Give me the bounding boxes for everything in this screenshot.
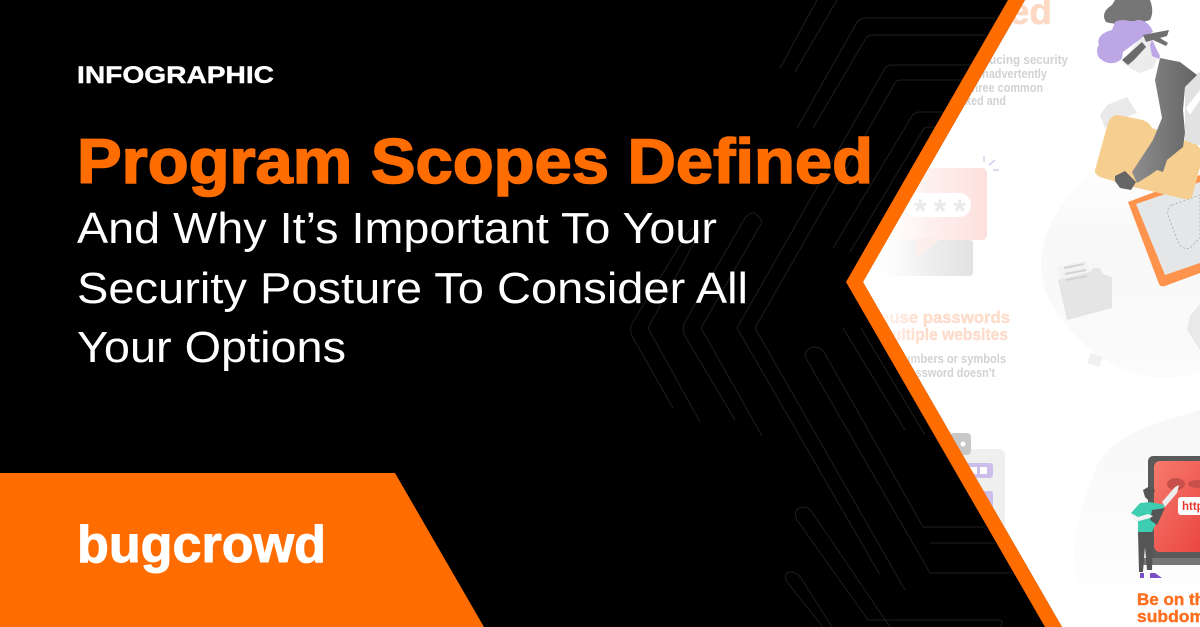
body <box>1185 72 1200 145</box>
face <box>1123 37 1157 73</box>
dark arm <box>1132 58 1197 183</box>
faded intro text: three common <box>968 81 1043 95</box>
subtitle: Security Posture To Consider All <box>77 264 748 313</box>
faded body text <box>906 354 1006 377</box>
background blobs <box>1041 150 1200 625</box>
orange chevron border <box>846 0 1062 627</box>
title: Program Scopes Defined <box>77 127 873 197</box>
yellow folder <box>1095 115 1200 199</box>
icon: password speech bubble <box>870 156 999 276</box>
illustration: person pointing at tablet with URL <box>1131 456 1200 578</box>
mask <box>1122 42 1146 65</box>
faded intro text <box>964 54 1068 105</box>
faded body text: password doesn't <box>903 366 996 380</box>
faded heading: reuse passwords: multiple websites <box>878 326 1008 344</box>
grey file folder <box>1057 260 1092 295</box>
icon: small diamond <box>1087 353 1103 367</box>
panel heading: be on the subdomain <box>1137 592 1200 622</box>
subtitle: And Why It’s Important To Your <box>77 204 717 253</box>
faded intro text: reducing security <box>971 53 1068 67</box>
url box <box>1178 497 1200 515</box>
icon: password form card <box>951 433 1005 528</box>
icon: password speech bubble: *** <box>914 193 967 229</box>
illustration: masked hacker with folder and tablet <box>1057 0 1200 350</box>
background circuit line pattern <box>631 0 1012 627</box>
panel: faded infographic preview <box>840 0 1200 627</box>
faded intro text: inadvertently <box>979 67 1047 81</box>
faded intro text: leaked and <box>950 94 1006 108</box>
tablet body <box>1148 456 1200 565</box>
logo: bugcrowd: bugcrowd <box>77 516 326 574</box>
logo block <box>0 473 484 627</box>
grey paper behind folder <box>1100 97 1137 128</box>
faded body text: numbers or symbols <box>897 352 1006 366</box>
subtitle: Your Options <box>77 323 346 372</box>
faded heading: reuse passwords <box>882 310 1010 344</box>
small grey shape <box>1187 304 1200 350</box>
red screen <box>1154 461 1200 552</box>
person <box>1138 532 1153 572</box>
purple hair <box>1097 20 1153 63</box>
hat <box>1104 0 1152 24</box>
left edge fade overlay <box>863 230 915 364</box>
subtitle <box>77 204 748 372</box>
eyebrow label: INFOGRAPHIC <box>77 62 274 89</box>
orange tablet <box>1128 175 1200 286</box>
glove <box>1115 171 1136 190</box>
faded heading: reuse passwords: Reuse passwords <box>868 309 1010 327</box>
